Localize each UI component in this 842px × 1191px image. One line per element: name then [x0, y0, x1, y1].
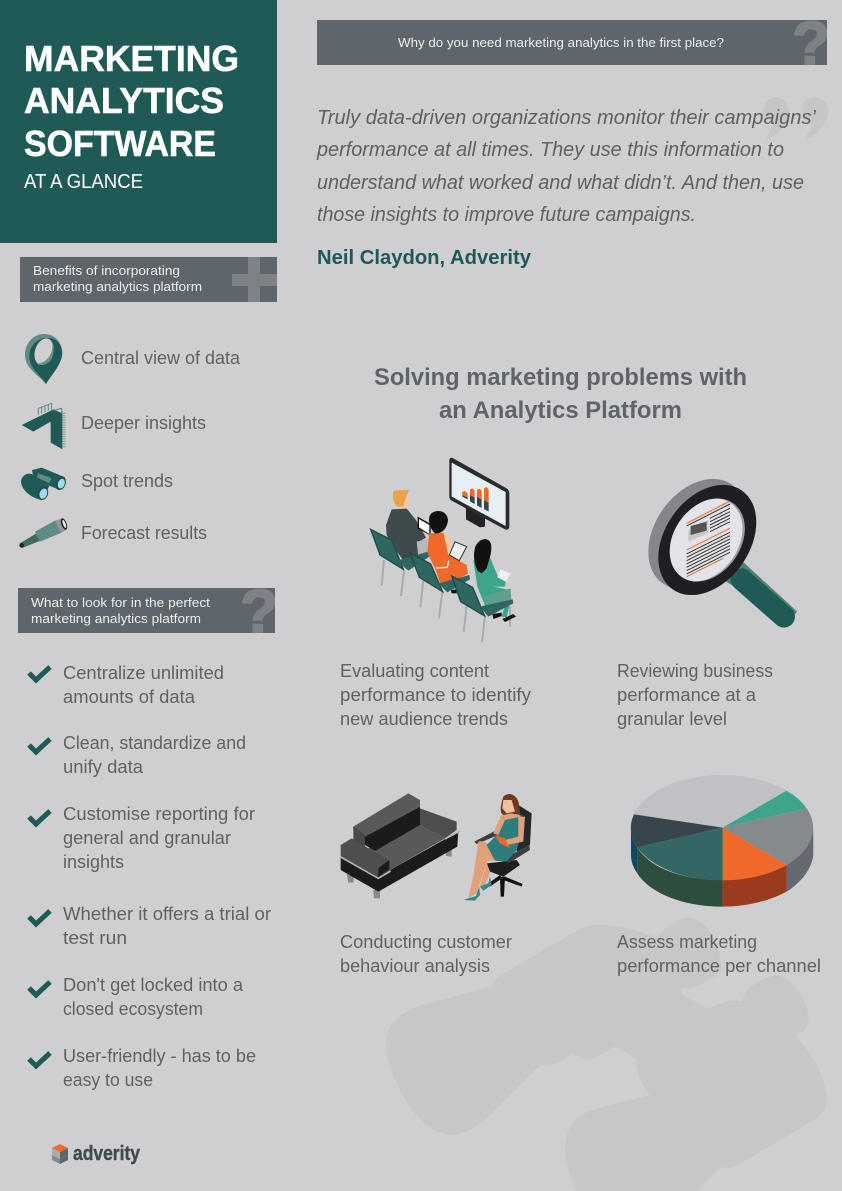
icon: telescope	[19, 517, 69, 548]
question bar	[317, 20, 827, 65]
section heading: an Analytics Platform	[439, 397, 682, 424]
quote attribution: Neil Claydon, Adverity	[317, 247, 532, 269]
woman in green	[473, 539, 516, 622]
quote: Truly data-driven organizations monitor their campaigns’	[317, 106, 816, 129]
benefits bar: marketing analytics platform	[33, 279, 202, 294]
chair legs	[382, 560, 510, 642]
benefits bar	[20, 257, 277, 302]
quote: those insights to improve future campaigns.	[317, 203, 696, 226]
check item 6	[29, 1046, 256, 1090]
check item 5: closed ecosystem	[63, 999, 203, 1019]
title panel: MARKETING	[24, 38, 239, 79]
check item 6: easy to use	[63, 1070, 153, 1090]
illustration: magnifying glass over document	[648, 478, 798, 628]
caption: evaluating content: Evaluating content	[340, 661, 489, 681]
benefit: forecast results	[19, 517, 207, 548]
caption: reviewing business: performance at a	[617, 685, 757, 705]
title panel: ANALYTICS	[24, 80, 224, 121]
check item 4: test run	[63, 928, 127, 948]
check item 4: Whether it offers a trial or	[63, 904, 271, 924]
caption: assess marketing performance: performance per channel	[617, 956, 821, 976]
icon: binoculars	[21, 468, 68, 502]
what to look for bar	[18, 588, 275, 633]
section heading	[374, 364, 747, 424]
caption: reviewing business: granular level	[617, 709, 727, 729]
chair 1	[371, 529, 429, 571]
benefit: deeper insights: Deeper insights	[81, 413, 206, 433]
chair 2	[410, 553, 470, 593]
chair 3	[452, 576, 513, 617]
check item 5: Don't get locked into a	[63, 975, 244, 995]
check item 5	[29, 975, 244, 1019]
check item 3	[29, 804, 255, 872]
check item 3: insights	[63, 852, 124, 872]
lens rim	[628, 460, 767, 608]
check item 4	[29, 904, 271, 948]
check item 6: User-friendly - has to be	[63, 1046, 256, 1066]
caption: conducting customer behaviour analysis: behaviour analysis	[340, 956, 490, 976]
check item 1: amounts of data	[63, 687, 196, 707]
handle	[723, 561, 797, 620]
caption: assess marketing performance: Assess marketing	[617, 932, 757, 952]
title panel: SOFTWARE	[24, 123, 216, 164]
pie chart	[631, 775, 813, 907]
check item 2	[29, 733, 246, 777]
caption: reviewing business	[617, 661, 773, 729]
pie top slices	[634, 775, 787, 828]
benefit: forecast results: Forecast results	[81, 523, 207, 543]
background binoculars watermark	[386, 917, 827, 1191]
benefit: spot trends	[21, 468, 173, 502]
question bar: ?	[792, 10, 830, 79]
section heading: Solving marketing problems with	[374, 364, 747, 391]
caption: assess marketing performance	[617, 932, 821, 976]
title panel: AT A GLANCE	[24, 171, 143, 193]
benefit: central view of data	[25, 334, 241, 384]
logo: adverity: adverity	[73, 1143, 141, 1165]
caption: evaluating content: performance to identify	[340, 685, 531, 705]
what to look for bar: ?	[240, 578, 278, 647]
illustration: audience watching chart on screen	[371, 458, 516, 642]
what to look for bar: What to look for in the perfect	[31, 595, 210, 610]
what to look for bar: marketing analytics platform	[31, 611, 201, 626]
quote	[316, 106, 816, 226]
check item 3: general and granular	[63, 828, 231, 848]
caption: evaluating content	[340, 661, 531, 729]
icon: map pin	[25, 334, 62, 384]
man	[386, 490, 431, 561]
caption: evaluating content: new audience trends	[340, 709, 508, 729]
check item 2: unify data	[63, 757, 144, 777]
document in lens	[670, 498, 742, 582]
sofa	[340, 793, 460, 898]
logo: adverity	[52, 1143, 141, 1165]
icon: quotation marks	[763, 97, 828, 140]
monitor	[449, 458, 509, 530]
icon: diving board	[22, 403, 64, 449]
benefits bar: Benefits of incorporating	[33, 263, 180, 278]
benefit: central view of data: Central view of data	[81, 348, 241, 368]
woman in office chair	[463, 794, 532, 901]
benefit: deeper insights	[22, 403, 206, 449]
caption: conducting customer behaviour analysis	[340, 932, 512, 976]
checklist	[29, 663, 271, 1090]
caption: conducting customer behaviour analysis: Conducting customer	[340, 932, 512, 952]
illustration: sofa and woman in chair	[340, 793, 532, 901]
check item 1: Centralize unlimited	[63, 663, 224, 683]
question bar: Why do you need marketing analytics in the first place?	[398, 35, 724, 50]
woman in orange	[427, 511, 468, 583]
quote: performance at all times. They use this information to	[316, 138, 784, 161]
pie sides	[631, 828, 813, 907]
caption: reviewing business: Reviewing business	[617, 661, 773, 681]
quote: understand what worked and what didn’t. And then, use	[317, 171, 804, 194]
check item 2: Clean, standardize and	[63, 733, 246, 753]
benefit: spot trends: Spot trends	[81, 471, 173, 491]
check item 3: Customise reporting for	[63, 804, 255, 824]
title panel	[0, 0, 277, 243]
check item 1	[29, 663, 224, 707]
